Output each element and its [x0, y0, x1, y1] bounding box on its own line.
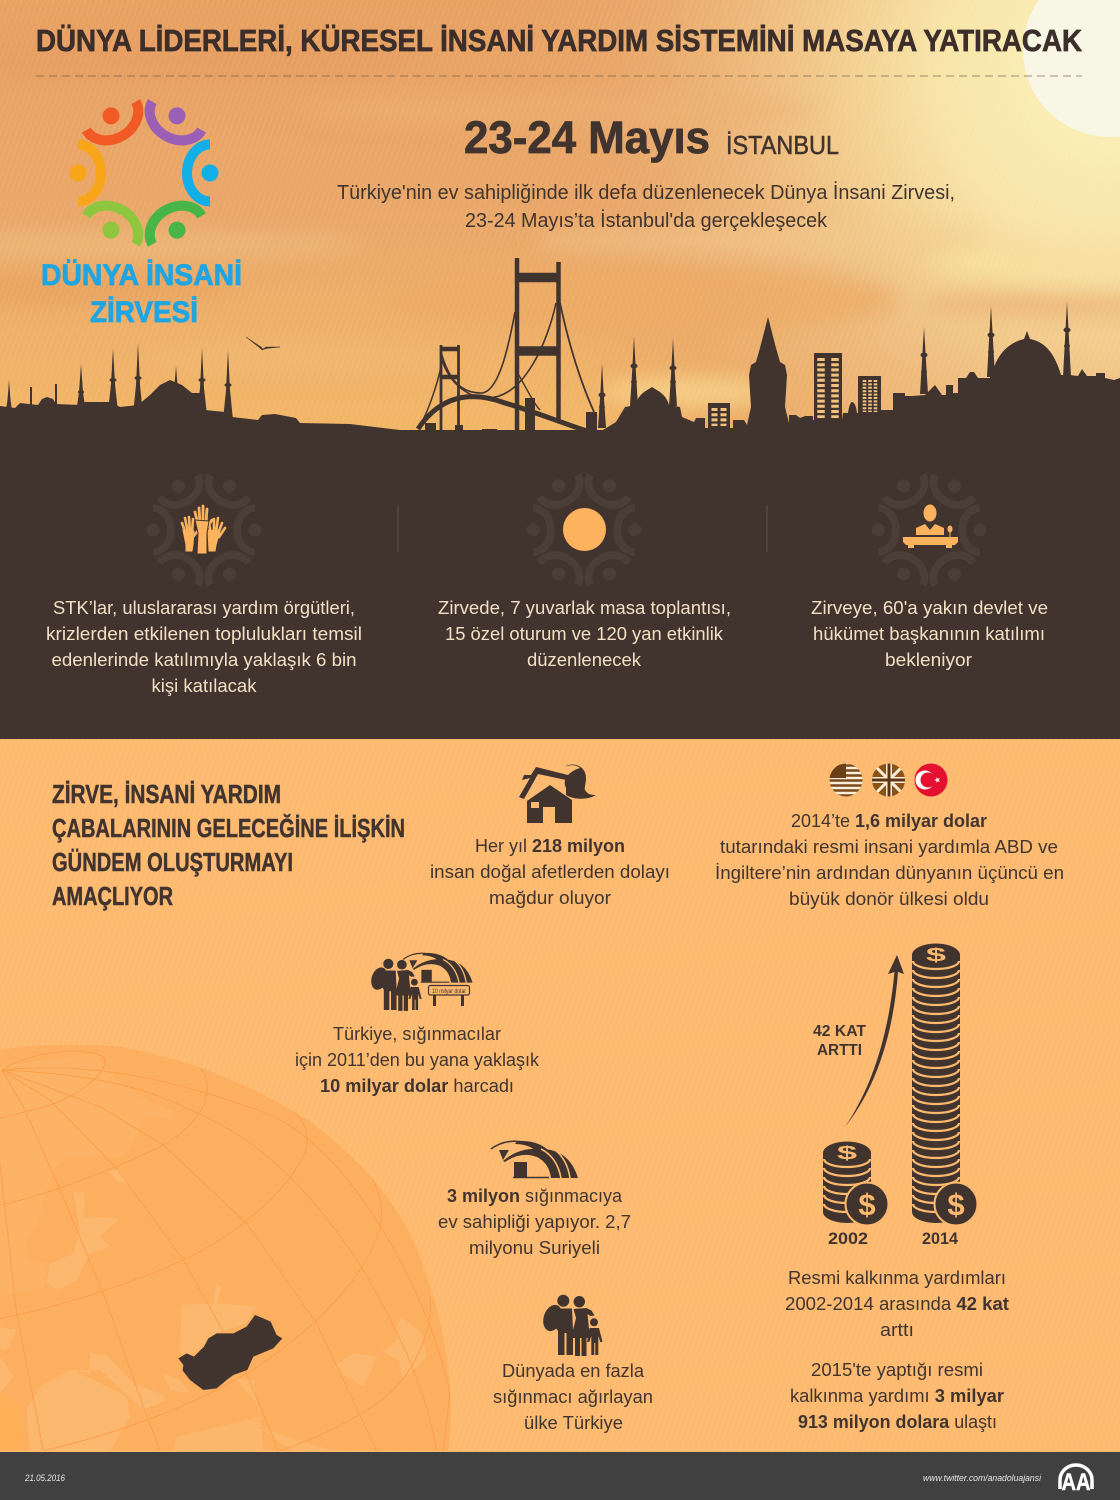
- stack 2014: [912, 944, 978, 1226]
- text: participants: krizlerden etkilenen toplulukları temsil: [46, 623, 362, 644]
- chart: coin stacks 2002 vs 2014: 2014: [922, 1229, 959, 1248]
- footer bar: [0, 1452, 1120, 1500]
- text: most refugees: sığınmacı ağırlayan: [493, 1386, 653, 1407]
- icon: refugees with camp and sign: [368, 953, 473, 1011]
- text: sessions: düzenlenecek: [527, 649, 642, 670]
- intro text: Türkiye'nin ev sahipliğinde ilk defa düzenlenecek Dünya İnsani Zirvesi,: [337, 181, 955, 204]
- stack 2002: $: [837, 1143, 857, 1163]
- text: most refugees: ülke Türkiye: [524, 1412, 623, 1433]
- text: development aid growth: 2002-2014 arasında 42 kat: [785, 1293, 1009, 1314]
- stack 2014: $: [926, 945, 946, 965]
- text: 2015 development aid: [790, 1359, 1004, 1432]
- text: donor country: tutarındaki resmi insani yardımla ABD ve: [720, 836, 1058, 857]
- icon: flags of USA, UK, Turkey: [829, 763, 948, 797]
- text: natural disasters: Her yıl 218 milyon: [475, 835, 625, 856]
- Istanbul skyline silhouette: [0, 301, 1120, 440]
- building windows: [714, 358, 876, 426]
- icon: refugee camp tent: [491, 1141, 578, 1178]
- text: participants: kişi katılacak: [152, 675, 257, 696]
- stack 2002: [823, 1142, 888, 1226]
- text: hosting refugees: [438, 1185, 631, 1258]
- intro text: 23-24 Mayıs’ta İstanbul'da gerçekleşecek: [465, 209, 828, 232]
- arrow label: ARTTI: [817, 1042, 862, 1059]
- text: heads of state: bekleniyor: [885, 649, 972, 670]
- section heading: ZİRVE, İNSANİ YARDIM: [52, 779, 281, 809]
- chart: coin stacks 2002 vs 2014: 2002: [828, 1229, 868, 1248]
- text: refugee spending: Türkiye, sığınmacılar: [333, 1023, 501, 1044]
- text: 2015 development aid: 913 milyon dolara ulaştı: [798, 1411, 997, 1432]
- icon: house in storm: [519, 764, 596, 823]
- arrow: growth: [845, 955, 904, 1127]
- text: 2015 development aid: kalkınma yardımı 3 milyar: [790, 1385, 1004, 1406]
- date heading: İSTANBUL: [726, 130, 839, 160]
- Turkey silhouette: [178, 1315, 282, 1390]
- section heading: [52, 779, 405, 911]
- sky background: [0, 0, 1120, 440]
- globe with Turkey highlighted: [0, 1045, 451, 1451]
- text: participants: edenlerinde katılımıyla yaklaşık 6 bin: [52, 649, 356, 670]
- text: participants: STK’lar, uluslararası yardım örgütleri,: [53, 597, 355, 618]
- text: sessions: [438, 597, 731, 670]
- text: refugee spending: 10 milyar dolar harcadı: [320, 1075, 514, 1096]
- text: participants: [46, 597, 362, 696]
- date heading: 23-24 Mayıs: [464, 112, 710, 163]
- text: donor country: 2014’te 1,6 milyar dolar: [791, 810, 987, 831]
- text: development aid growth: Resmi kalkınma yardımları: [788, 1267, 1006, 1288]
- logo: Dünya İnsani Zirvesi: ZİRVESİ: [90, 296, 198, 329]
- text: heads of state: Zirveye, 60'a yakın devlet ve: [811, 597, 1048, 618]
- arrow label: 42 KAT: [813, 1023, 866, 1040]
- intro text: [337, 181, 955, 232]
- footer bar: www.twitter.com/anadoluajansi: [923, 1473, 1042, 1483]
- icon: refugee family: [540, 1295, 602, 1356]
- sun: [1023, 0, 1120, 137]
- text: natural disasters: insan doğal afetlerden dolayı: [430, 861, 670, 882]
- text: hosting refugees: ev sahipliği yapıyor. 2,7: [438, 1211, 631, 1232]
- icon: speaker at podium: [903, 504, 958, 548]
- text: donor country: İngiltere’nin ardından dünyanın üçüncü en: [715, 862, 1064, 883]
- text: refugee spending: için 2011’den bu yana yaklaşık: [295, 1049, 540, 1070]
- text: most refugees: [493, 1360, 653, 1433]
- text: natural disasters: [430, 835, 670, 908]
- icon: seagull: [246, 337, 280, 350]
- text: refugee spending: [295, 1023, 540, 1096]
- logo: Dünya İnsani Zirvesi: DÜNYA İNSANİ: [41, 259, 242, 292]
- text: hosting refugees: milyonu Suriyeli: [469, 1237, 600, 1258]
- text: donor country: büyük donör ülkesi oldu: [789, 888, 989, 909]
- text: sessions: Zirvede, 7 yuvarlak masa toplantısı,: [438, 597, 731, 618]
- text: natural disasters: mağdur oluyor: [489, 887, 611, 908]
- section heading: AMAÇLIYOR: [52, 881, 173, 911]
- section heading: GÜNDEM OLUŞTURMAYI: [52, 847, 293, 877]
- icon: raised hands: [182, 506, 225, 554]
- map land patches: [0, 1053, 427, 1451]
- icon: round table: [563, 508, 606, 551]
- chart: coin stacks 2002 vs 2014: [813, 944, 978, 1248]
- text: heads of state: [811, 597, 1048, 670]
- footer bar: 21.05.2016: [24, 1473, 65, 1483]
- stack 2014: $: [947, 1187, 965, 1222]
- icon: AA logo: AA: [1062, 1469, 1090, 1496]
- text: hosting refugees: 3 milyon sığınmacıya: [447, 1185, 623, 1206]
- text: development aid growth: arttı: [880, 1319, 914, 1340]
- text: heads of state: hükümet başkanının katılımı: [813, 623, 1045, 644]
- lower panel background: [0, 739, 1120, 1452]
- text: donor country: [715, 810, 1064, 909]
- stack 2002: $: [858, 1187, 876, 1222]
- date heading: [464, 112, 839, 163]
- panel icons: summit logo watermarks: [147, 469, 986, 591]
- graticule: [0, 1045, 450, 1451]
- text: 2015 development aid: 2015'te yaptığı resmi: [811, 1359, 983, 1380]
- dark panel: [0, 430, 1120, 739]
- section heading: ÇABALARININ GELECEĞİNE İLİŞKİN: [52, 813, 405, 843]
- text: most refugees: Dünyada en fazla: [502, 1360, 645, 1381]
- arrow label: [813, 1023, 866, 1059]
- text: sessions: 15 özel oturum ve 120 yan etkinlik: [445, 623, 724, 644]
- text: development aid growth: [785, 1267, 1009, 1340]
- icon: refugees with camp and sign: 10 milyar dolar: [432, 988, 467, 995]
- logo: Dünya İnsani Zirvesi: [41, 94, 242, 329]
- Bosphorus bridge: [418, 258, 594, 434]
